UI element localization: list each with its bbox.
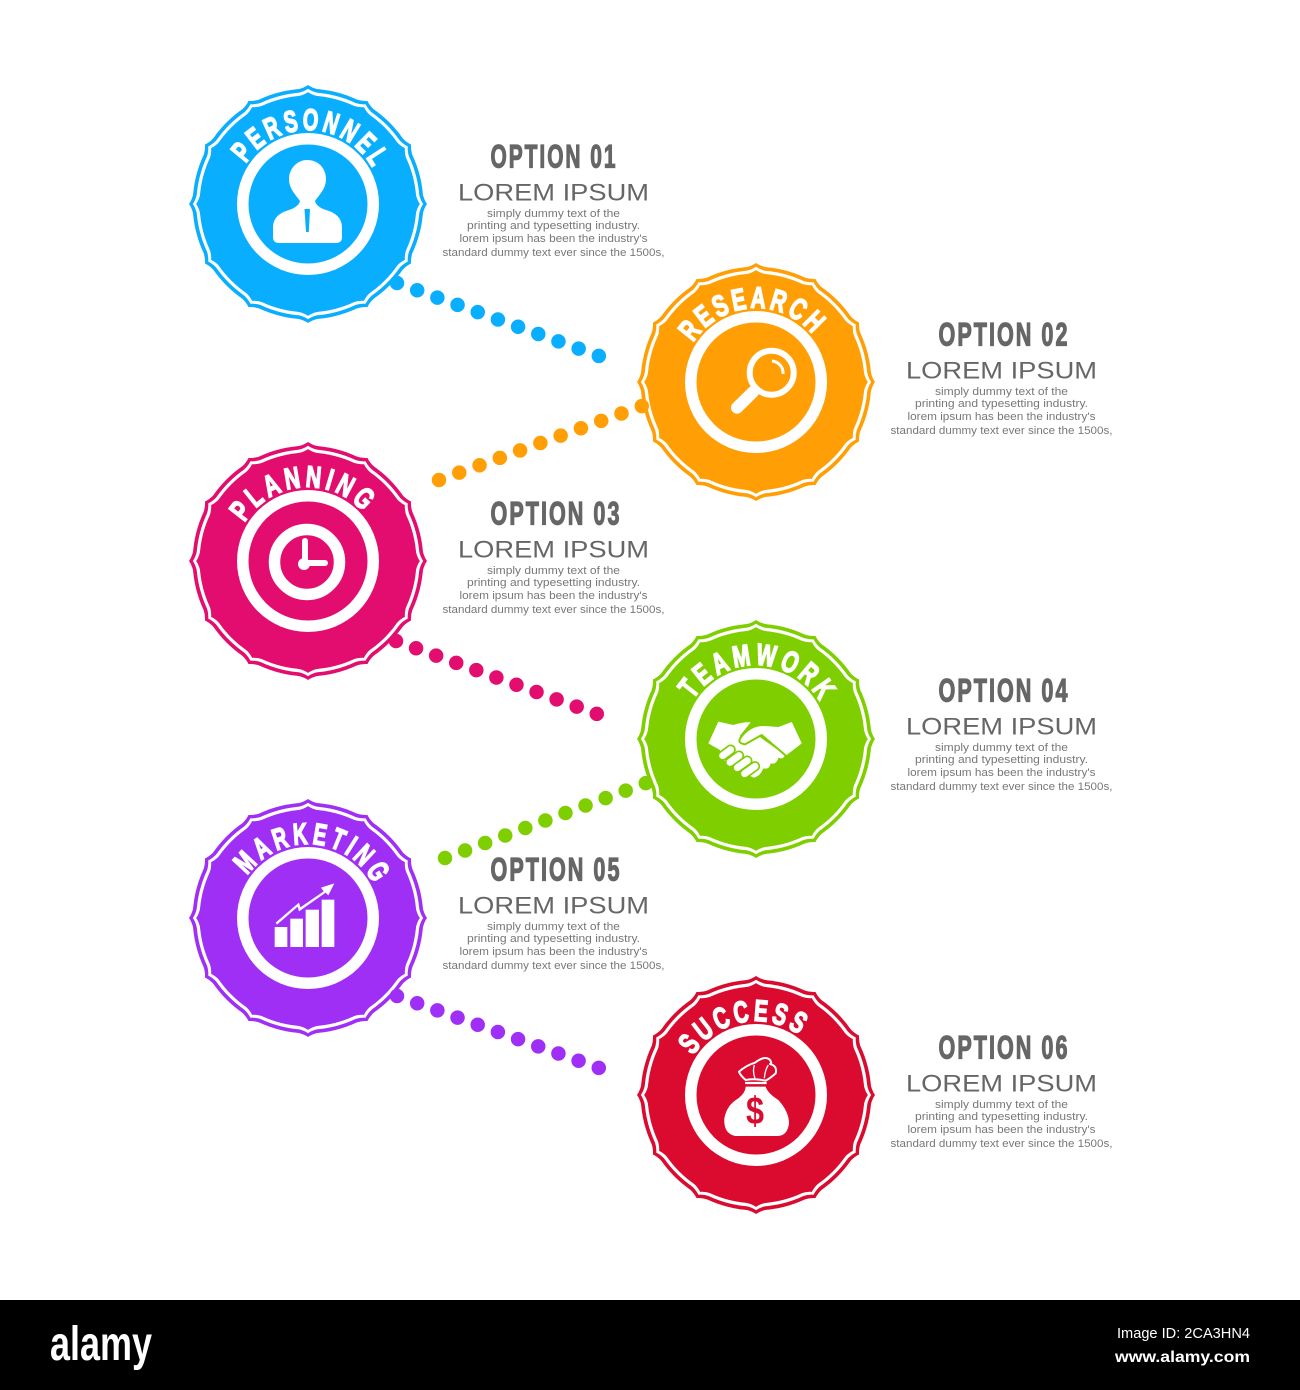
icon: magnifying glass	[737, 351, 794, 408]
text block: option 03: lorem ipsum has been the industry's	[460, 590, 648, 602]
icon: rising bar chart	[275, 883, 334, 947]
text block: option 04	[890, 672, 1112, 793]
text block: option 01	[442, 138, 664, 259]
text block: option 04: simply dummy text of the	[935, 742, 1068, 754]
text block: option 02: simply dummy text of the	[935, 386, 1068, 398]
text block: option 02: OPTION 02	[938, 316, 1070, 352]
badge label: SUCCESS: SUCCESS	[678, 999, 808, 1054]
icon: money bag: $	[746, 1089, 764, 1133]
text block: option 01: simply dummy text of the	[487, 208, 620, 220]
text block: option 01: LOREM IPSUM	[458, 180, 649, 206]
badge label: MARKETING: MARKETING	[232, 822, 389, 881]
badge label: PLANNING: PLANNING	[228, 465, 374, 522]
text block: option 02	[890, 316, 1112, 437]
text block: option 06: lorem ipsum has been the industry's	[908, 1124, 1096, 1136]
text block: option 06: OPTION 06	[938, 1030, 1070, 1066]
badge: planning	[189, 442, 427, 680]
text block: option 06: LOREM IPSUM	[906, 1070, 1097, 1098]
badge: personnel	[189, 85, 427, 323]
text block: option 01: printing and typesetting industry.	[467, 220, 640, 232]
text block: option 05: printing and typesetting industry.	[467, 933, 640, 945]
text block: option 06	[890, 1030, 1112, 1150]
badge: teamwork	[637, 620, 875, 858]
text block: option 02: standard dummy text ever since the 1500s,	[890, 425, 1112, 437]
text block: option 03: OPTION 03	[490, 496, 622, 532]
text block: option 04: lorem ipsum has been the industry's	[908, 767, 1096, 779]
text block: option 01: standard dummy text ever since the 1500s,	[442, 247, 664, 259]
text block: option 06: standard dummy text ever since the 1500s,	[890, 1138, 1112, 1150]
badge: success	[637, 976, 875, 1214]
badge: marketing	[189, 799, 427, 1037]
text block: option 04: printing and typesetting industry.	[915, 754, 1088, 766]
text block: option 04: standard dummy text ever since the 1500s,	[890, 781, 1112, 793]
icon: person with tie	[273, 160, 342, 243]
text block: option 03: LOREM IPSUM	[458, 536, 649, 564]
text block: option 01: lorem ipsum has been the industry's	[460, 233, 648, 245]
footer band: alamy credit: alamy	[50, 1318, 152, 1371]
badge: research	[637, 263, 875, 501]
text block: option 02: LOREM IPSUM	[906, 358, 1097, 384]
badge label: RESEARCH: RESEARCH	[676, 286, 828, 342]
footer band: alamy credit: www.alamy.com	[1114, 1349, 1250, 1366]
text block: option 03: printing and typesetting industry.	[467, 577, 640, 589]
icon: handshake	[708, 721, 803, 778]
text block: option 03: standard dummy text ever since the 1500s,	[442, 604, 664, 616]
footer band: alamy credit: Image ID: 2CA3HN4	[1117, 1325, 1250, 1342]
connector: blue dotted line	[397, 283, 599, 356]
footer band: alamy credit	[0, 1300, 1300, 1390]
text block: option 01: OPTION 01	[490, 138, 618, 174]
text block: option 03: simply dummy text of the	[487, 565, 620, 577]
text block: option 04: OPTION 04	[938, 672, 1070, 708]
icon: money bag	[724, 1058, 789, 1136]
text block: option 05: LOREM IPSUM	[458, 892, 649, 920]
text block: option 05: simply dummy text of the	[487, 921, 620, 933]
connector: green dotted line	[445, 783, 646, 858]
connector: orange dotted line	[439, 406, 642, 480]
connector: purple dotted line	[397, 996, 599, 1068]
text block: option 04: LOREM IPSUM	[906, 714, 1097, 740]
text block: option 02: printing and typesetting industry.	[915, 398, 1088, 410]
badge label: TEAMWORK: TEAMWORK	[676, 642, 838, 702]
text block: option 05: OPTION 05	[490, 852, 622, 888]
connector: magenta dotted line	[396, 641, 597, 714]
text block: option 05	[442, 852, 664, 972]
text block: option 05: lorem ipsum has been the industry's	[460, 946, 648, 958]
text block: option 03	[442, 496, 664, 616]
icon: clock	[274, 530, 340, 594]
text block: option 02: lorem ipsum has been the industry's	[908, 411, 1096, 423]
text block: option 06: printing and typesetting industry.	[915, 1111, 1088, 1123]
text block: option 05: standard dummy text ever since the 1500s,	[442, 960, 664, 972]
badge label: PERSONNEL: PERSONNEL	[230, 108, 386, 168]
text block: option 06: simply dummy text of the	[935, 1099, 1068, 1111]
